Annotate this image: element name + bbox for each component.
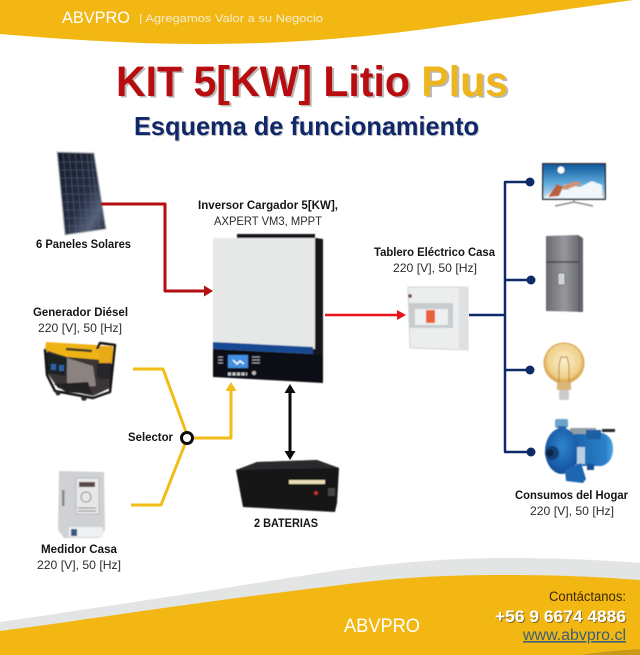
label: house meter: Medidor Casa: [41, 542, 117, 556]
label: household loads: [515, 488, 628, 518]
icon: television: [542, 163, 606, 206]
tagline: | Agregamos Valor a su Negocio: [139, 13, 323, 25]
label: selector: Selector: [128, 430, 173, 444]
subtitle: Esquema de funcionamiento: [135, 112, 480, 142]
label: electrical panel: [374, 245, 495, 275]
arrow: solar to inverter: [101, 204, 213, 296]
top logo: ABVPRO: [62, 8, 130, 27]
title: KIT 5[KW] Litio Plus: [118, 60, 510, 108]
contact heading: Contáctanos:: [549, 589, 626, 604]
icon: house meter: [58, 471, 105, 538]
icon: electrical panel: [408, 287, 468, 350]
phone number: +56 9 6674 4886: [495, 607, 626, 626]
label: solar panels: 6 Paneles Solares: [36, 237, 131, 251]
icon: selector switch: [182, 432, 192, 444]
label: house meter: [37, 542, 121, 572]
label: diesel generator: Generador Diésel: [33, 305, 128, 319]
title: KIT 5[KW] Litio Plus: [116, 58, 508, 106]
connector: consumption bus: [469, 178, 536, 456]
icon: water pump: [545, 419, 615, 483]
icon: diesel generator: [45, 342, 115, 401]
top banner: [0, 0, 633, 44]
label: household loads: 220 [V], 50 [Hz]: [530, 504, 614, 518]
icon: batteries: [236, 460, 339, 512]
label: inverter: Inversor Cargador 5[KW],: [198, 198, 338, 212]
arrow: generator to selector: [133, 369, 186, 432]
arrow: selector to inverter: [193, 382, 236, 438]
arrow: inverter to battery: [284, 384, 296, 460]
arrow: meter to selector: [131, 444, 185, 505]
website: www.abvpro.cl: [522, 627, 626, 644]
label: household loads: Consumos del Hogar: [515, 488, 628, 502]
label: house meter: 220 [V], 50 [Hz]: [37, 558, 121, 572]
footer banner: [0, 558, 640, 655]
icon: refrigerator: [546, 235, 583, 312]
bottom logo: ABVPRO: [344, 616, 420, 637]
label: inverter: AXPERT VM3, MPPT: [214, 214, 323, 228]
label: diesel generator: 220 [V], 50 [Hz]: [38, 321, 122, 335]
label: electrical panel: 220 [V], 50 [Hz]: [393, 261, 477, 275]
arrow: inverter to panel: [325, 310, 406, 320]
subtitle: Esquema de funcionamiento: [134, 111, 479, 141]
icon: light bulb: [544, 343, 584, 400]
phone number: +56 9 6674 4886: [496, 608, 627, 627]
label: electrical panel: Tablero Eléctrico Casa: [374, 245, 495, 259]
icon: inverter: [213, 234, 323, 383]
icon: solar panel: [57, 152, 106, 235]
label: diesel generator: [33, 305, 128, 335]
label: batteries: 2 BATERIAS: [254, 516, 318, 530]
label: inverter: [198, 198, 338, 228]
